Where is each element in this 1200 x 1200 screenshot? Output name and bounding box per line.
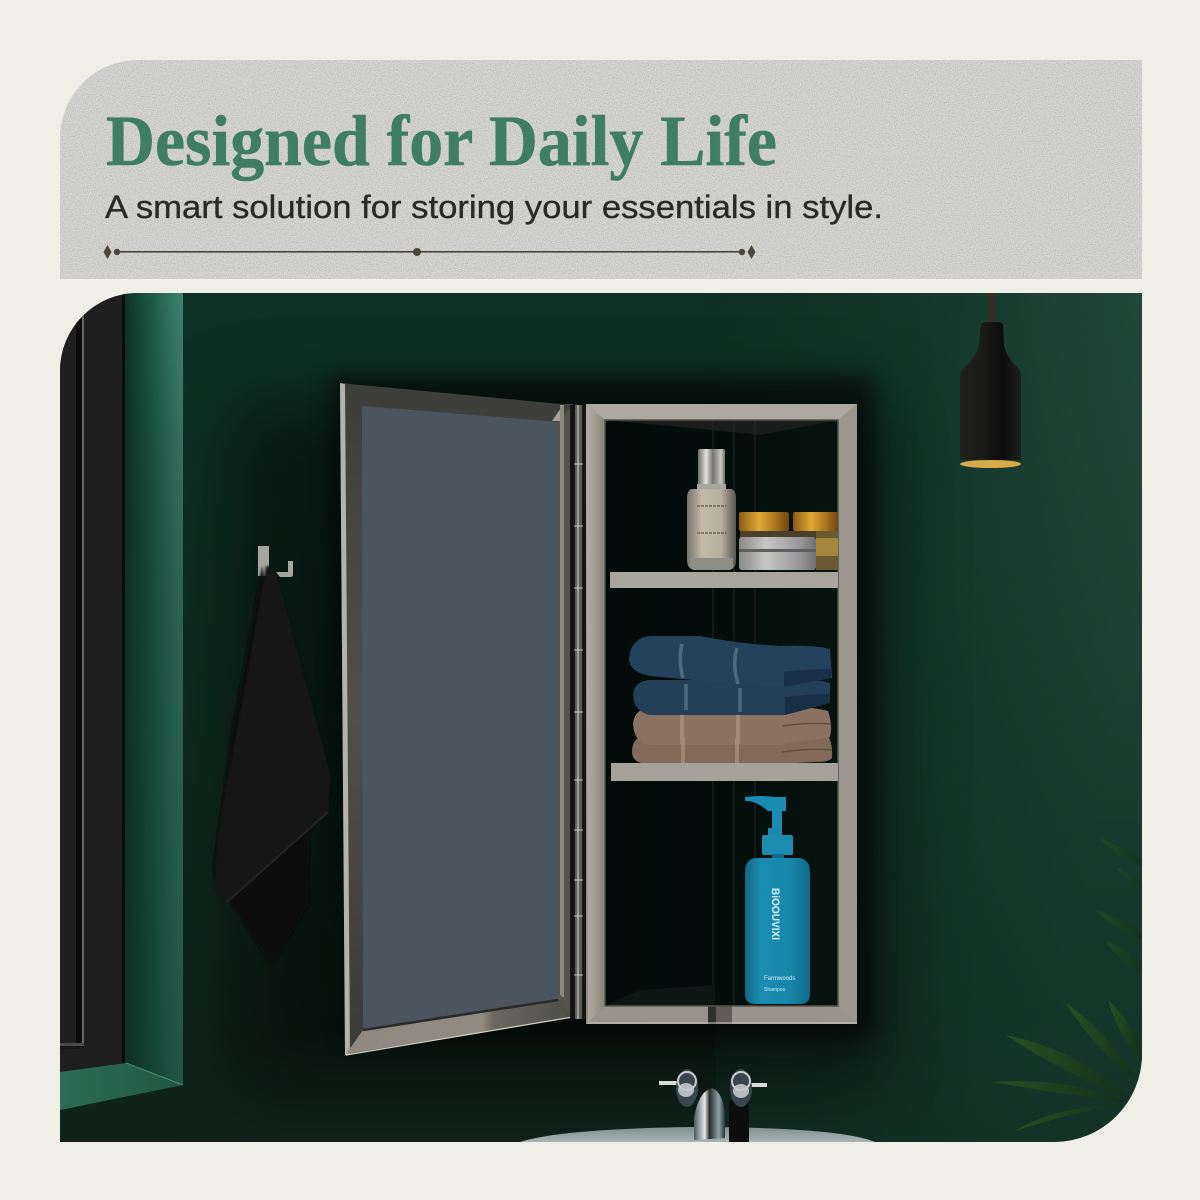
plant leaves [993,838,1142,1131]
wall hook [258,546,293,577]
frame left [586,404,605,1022]
serum bottle [687,449,736,570]
cabinet interior [605,420,838,1006]
left tap [659,1069,698,1107]
black hand towel on hook [213,546,331,967]
faucet and sink [520,1069,875,1142]
sink basin [520,1127,875,1142]
frame top [586,404,857,420]
header panel [60,60,1142,279]
photo panel: bathroom scene [60,293,1142,1142]
frame right [838,404,857,1024]
shelf two [611,763,838,781]
window recess with frame and sill [60,293,183,1110]
ornamental divider [104,245,756,259]
spout [694,1088,725,1140]
bottle label: Farmwoods [764,976,795,982]
tan towels [632,707,832,764]
top shelf with serum and jars [610,449,838,588]
navy towels [629,636,832,715]
wall shadow around cabinet [230,375,890,1090]
cabinet body [586,404,857,1024]
lamp glow [960,460,1021,468]
right tap [730,1069,767,1107]
hinge [570,405,586,1019]
shelf one [610,572,838,588]
bottle label [764,888,795,993]
jars [739,512,838,570]
middle shelf with towels [611,636,838,781]
pendant lamp [960,293,1021,468]
cabinet door open with mirror [340,383,573,1055]
blue pump bottle [745,796,810,1004]
subtitle: A smart solution for storing your essentials in style. [105,189,883,225]
frame bottom [588,1006,857,1024]
title: Designed for Daily Life [106,101,777,181]
left wall [60,293,718,1142]
right wall [705,293,1142,1142]
bottle label: BiOOUVIXI [769,888,781,940]
bottle label: Shampoo [764,987,786,993]
